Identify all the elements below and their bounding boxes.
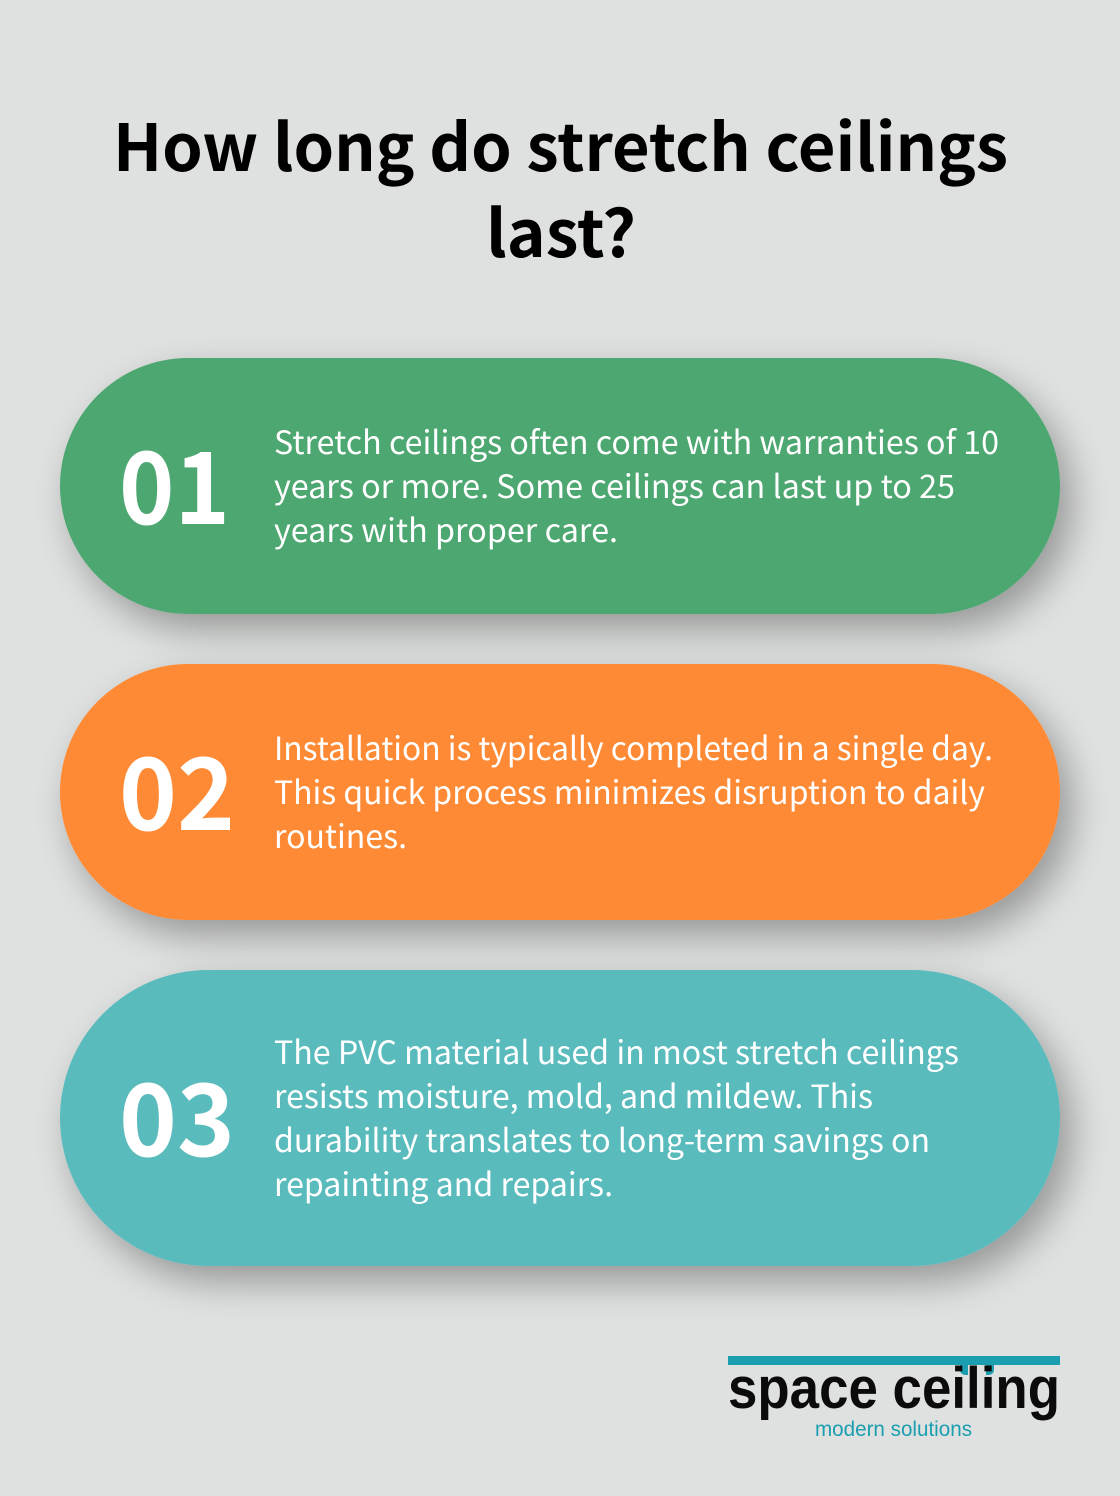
panel: step 01 bbox=[60, 358, 1060, 614]
text block 02: This quick process minimizes disruption to daily bbox=[274, 768, 985, 814]
panel: step 02 bbox=[60, 664, 1060, 920]
text block 02: Installation is typically completed in a single day. bbox=[274, 724, 993, 770]
logo: space ceiling: space ceiling bbox=[728, 1356, 1060, 1421]
text block 01 bbox=[274, 418, 999, 552]
text block 01: Stretch ceilings often come with warranties of 10 bbox=[274, 418, 999, 464]
number 01: 01 bbox=[119, 408, 230, 553]
title: How long do stretch ceilings bbox=[113, 96, 1008, 190]
text block 03: repainting and repairs. bbox=[274, 1160, 613, 1206]
text block 01: years with proper care. bbox=[274, 506, 618, 552]
number 03: 03 bbox=[119, 1040, 235, 1185]
title bbox=[113, 96, 1008, 276]
text block 03: durability translates to long-term savings on bbox=[274, 1116, 930, 1162]
text block 02: routines. bbox=[274, 812, 407, 858]
text block 03: resists moisture, mold, and mildew. This bbox=[274, 1072, 873, 1118]
number 02: 02 bbox=[119, 714, 235, 859]
text block 02 bbox=[274, 724, 993, 858]
text block 01: years or more. Some ceilings can last up to 25 bbox=[274, 462, 955, 508]
panel: step 03 bbox=[60, 970, 1060, 1266]
text block 03: The PVC material used in most stretch ceilings bbox=[274, 1028, 959, 1074]
logo: space ceiling: modern solutions bbox=[815, 1418, 972, 1441]
title: last? bbox=[486, 182, 636, 276]
text block 03 bbox=[274, 1028, 959, 1206]
